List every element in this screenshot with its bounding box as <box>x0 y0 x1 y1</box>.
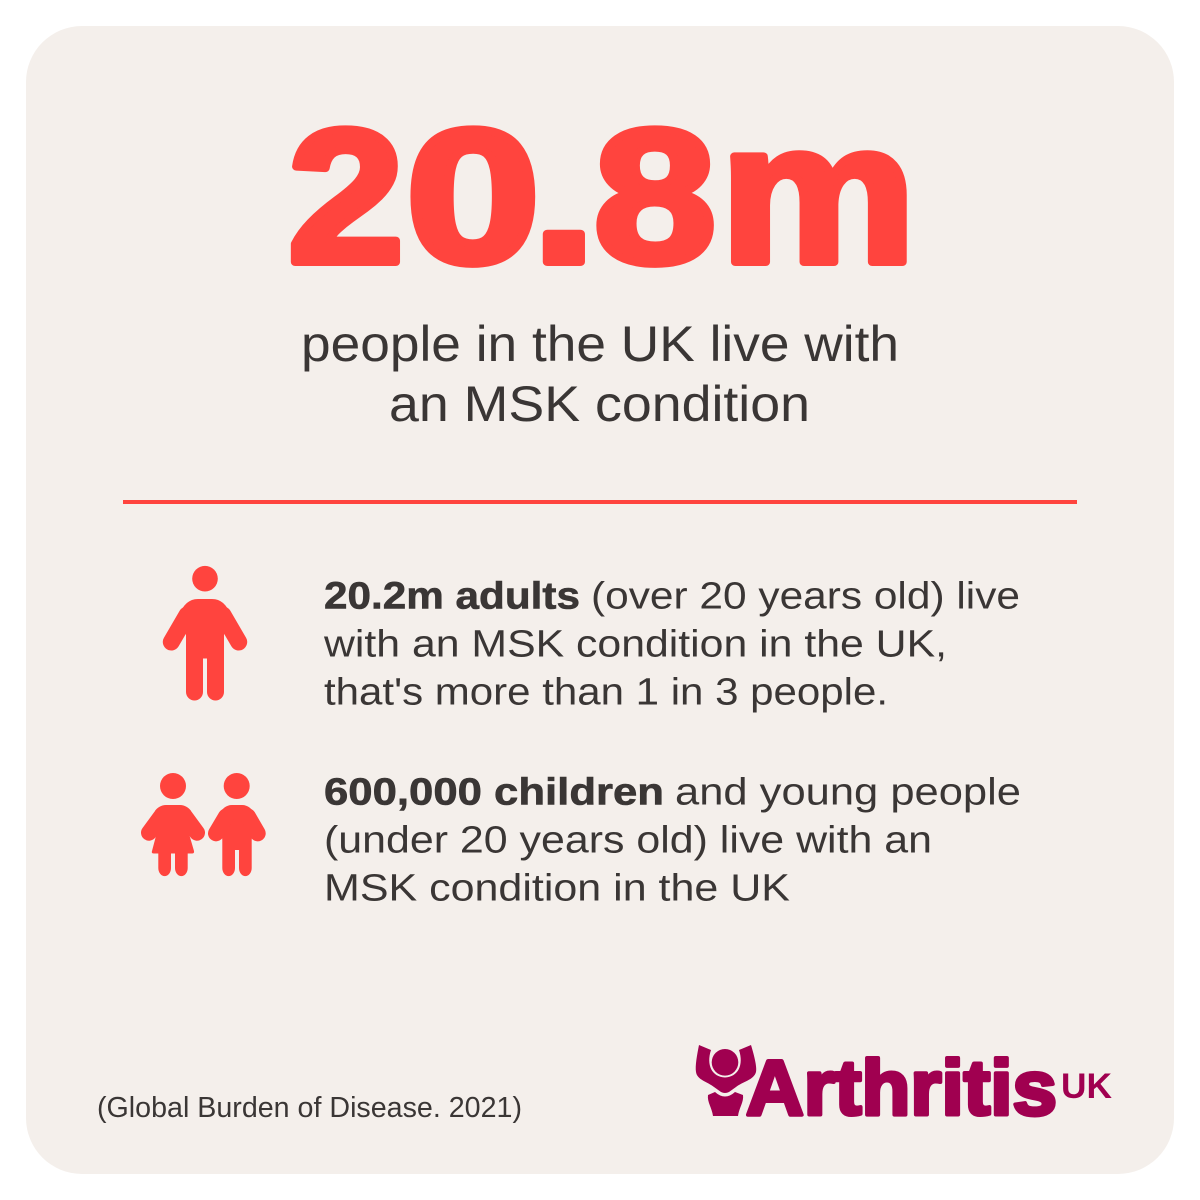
subtitle text block <box>301 316 899 432</box>
text block: adults statistic: with an MSK condition in the UK, <box>323 624 947 666</box>
title: 20.8m headline statistic: 8 <box>594 91 716 303</box>
subtitle text block: people in the UK live with <box>301 316 899 372</box>
icon: logo raised-arms figure <box>696 1045 756 1116</box>
icon: two children figures <box>149 773 258 876</box>
source citation: (Global Burden of Disease. 2021) <box>97 1092 522 1124</box>
text block: adults statistic: that's more than 1 in 3 people. <box>324 672 888 714</box>
title: 20.8m headline statistic: . <box>532 91 596 303</box>
text block: children statistic <box>324 772 1021 910</box>
text block: adults statistic: 20.2m adults <box>324 576 580 618</box>
text block: children statistic: 600,000 children <box>324 772 664 814</box>
text block: children statistic: (under 20 years old) live with an <box>324 820 932 862</box>
text block: children statistic: MSK condition in the UK <box>324 868 790 910</box>
logo UK suffix: UK <box>1061 1067 1112 1106</box>
title: 20.8m headline statistic: 0 <box>406 91 540 303</box>
subtitle text block: an MSK condition <box>389 376 810 432</box>
text block: adults statistic: (over 20 years old) live <box>591 576 1020 618</box>
text block: children statistic: and young people <box>675 772 1021 814</box>
title: 20.8m headline statistic: 2 <box>288 91 404 303</box>
text block: adults statistic <box>323 576 1020 714</box>
logo wordmark: Arthritis <box>746 1044 1057 1132</box>
title: 20.8m headline statistic: m <box>720 82 916 305</box>
icon: adult figure <box>171 566 239 700</box>
logo: Arthritis UK <box>696 1044 1112 1132</box>
